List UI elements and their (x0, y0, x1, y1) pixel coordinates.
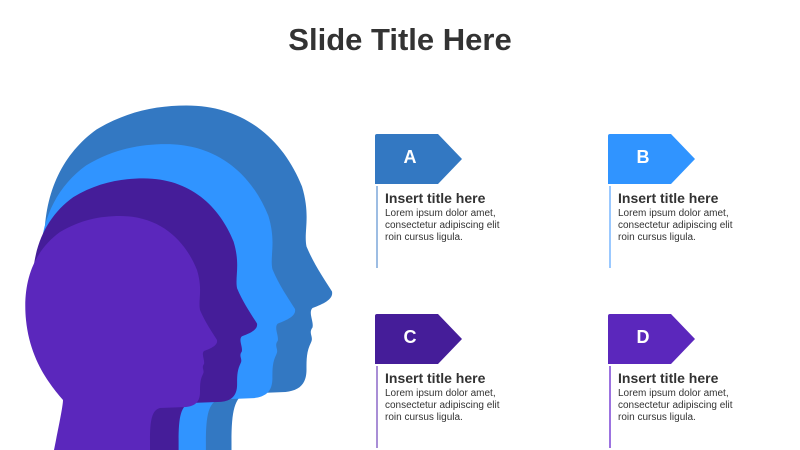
card A: roin cursus ligula. (385, 232, 463, 243)
card B: consectetur adipiscing elit (618, 220, 733, 231)
card D: Insert title here (618, 370, 718, 386)
card A: A (404, 147, 416, 167)
head: dark blue (44, 106, 332, 450)
card D: consectetur adipiscing elit (618, 400, 733, 411)
tab D (608, 314, 695, 364)
card B: roin cursus ligula. (618, 232, 696, 243)
card C: Insert title here (385, 370, 485, 386)
title: Slide Title Here (288, 22, 512, 57)
head: dark purple (33, 178, 257, 450)
head: light blue (40, 144, 295, 450)
card D: Lorem ipsum dolor amet, (618, 388, 729, 399)
head: purple (25, 216, 217, 450)
card B: Lorem ipsum dolor amet, (618, 208, 729, 219)
card D (608, 314, 733, 448)
card D: D (636, 327, 650, 347)
tab A (375, 134, 462, 184)
tab C (375, 314, 462, 364)
card B: B (636, 147, 650, 167)
card A (375, 134, 500, 268)
card C (375, 314, 500, 448)
card D: roin cursus ligula. (618, 412, 696, 423)
heads illustration (25, 106, 332, 450)
card B (608, 134, 733, 268)
tab B (608, 134, 695, 184)
card A: consectetur adipiscing elit (385, 220, 500, 231)
card C: Lorem ipsum dolor amet, (385, 388, 496, 399)
card A: Insert title here (385, 190, 485, 206)
card B: Insert title here (618, 190, 718, 206)
card A: Lorem ipsum dolor amet, (385, 208, 496, 219)
card C: roin cursus ligula. (385, 412, 463, 423)
card C: C (404, 327, 416, 347)
card C: consectetur adipiscing elit (385, 400, 500, 411)
